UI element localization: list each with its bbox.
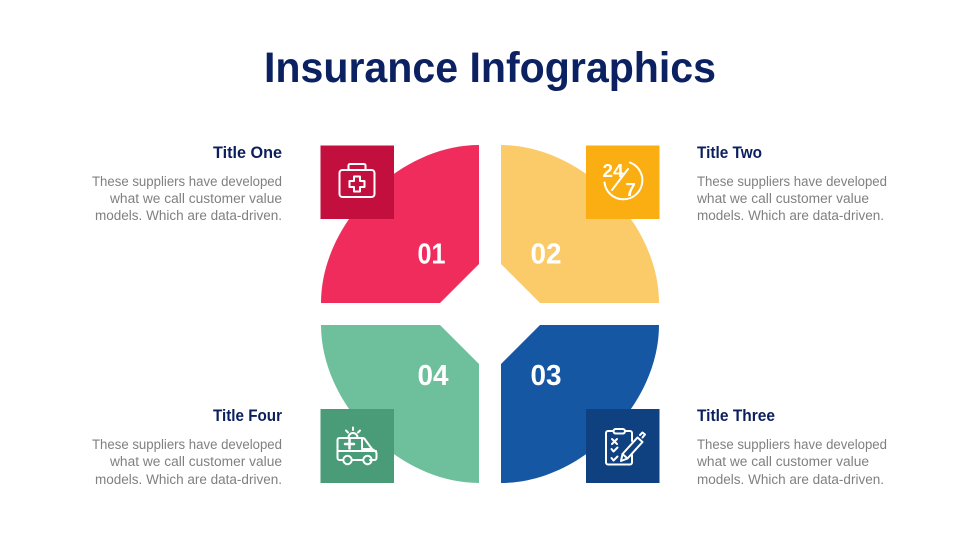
icon: checklist and pen [586,409,660,483]
text block: Title Three [696,406,887,487]
panel: quadrant 01: 01 [418,238,446,270]
text block: Title Two: These suppliers have developed [697,174,887,189]
panel: quadrant 02 [501,145,659,303]
text block: Title Two: models. Which are data-driven. [697,208,884,223]
panel: quadrant 01 [321,145,479,303]
text block: Title Three: Title Three [697,406,775,425]
text block: Title One: Title One [213,143,282,162]
icon: first aid kit [320,146,394,219]
text block: Title Two: Title Two [697,143,762,162]
icon: 24/7 [586,146,660,219]
panel: quadrant 03 [501,325,659,483]
panel: quadrant 03: 03 [530,360,562,392]
text block: Title Four: These suppliers have developed [92,437,282,452]
text block: Title Two [696,143,887,223]
text block: Title Four: Title Four [213,406,282,425]
icon: ambulance [320,409,394,483]
panel: quadrant 04: 04 [418,360,449,392]
icon: 24/7: 24 [602,161,624,181]
panel: quadrant 04 [321,325,479,483]
text block: Title Two: what we call customer value [696,191,869,206]
text block: Title One: what we call customer value [109,191,282,206]
text block: Title One: models. Which are data-driven. [95,208,282,223]
icon: 24/7: 7 [626,179,636,200]
text block: Title Three: These suppliers have developed [697,437,887,452]
text block: Title One: These suppliers have developed [92,174,282,189]
text block: Title One [92,143,282,223]
text block: Title Four: models. Which are data-driven. [95,472,282,487]
text block: Title Four: what we call customer value [109,454,282,469]
text block: Title Three: what we call customer value [696,454,869,469]
panel: quadrant 02: 02 [530,238,562,270]
text block: Title Three: models. Which are data-driven. [697,472,884,487]
text block: Title Four [92,406,282,487]
title: Insurance Infographics [264,44,716,92]
